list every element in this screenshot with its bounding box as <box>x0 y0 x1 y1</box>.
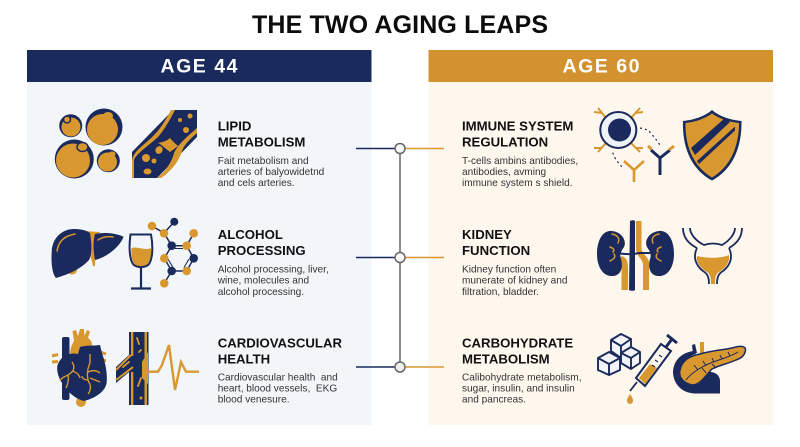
icon: wine glass <box>130 234 152 288</box>
text: alcohol processing: alcohol processing. <box>218 287 304 298</box>
text: immune system regulation: immune system s shield. <box>462 178 573 189</box>
connector: row 2 <box>356 252 444 262</box>
text: lipid metabolism: Fait metabolism and <box>218 156 309 167</box>
text: carbohydrate metabolism: and pancreas. <box>462 395 526 406</box>
icon: antibodies <box>613 128 674 182</box>
text: kidney function: FUNCTION <box>462 243 530 258</box>
connector: timeline spine <box>356 144 444 372</box>
icon: liver <box>51 229 124 278</box>
icon: heart <box>52 329 107 407</box>
text: cardiovascular health: blood venesure. <box>218 395 290 406</box>
heading: age 44 <box>27 50 372 82</box>
text: kidney function: Kidney function often <box>462 265 556 276</box>
text: alcohol processing: Alcohol processing, liver, <box>218 265 329 276</box>
title: THE TWO AGING LEAPS <box>252 11 548 39</box>
text: immune system regulation: REGULATION <box>462 135 548 150</box>
text: kidney function <box>462 227 568 298</box>
icon: T-cell <box>594 108 643 152</box>
icon: syringe <box>627 335 677 404</box>
text: immune system regulation: antibodies, avming <box>462 167 546 178</box>
text: cardiovascular health <box>218 335 342 406</box>
text: kidney function: filtration, bladder. <box>462 287 539 298</box>
icon: sugar cubes <box>598 334 640 375</box>
panel: age 60 <box>428 50 773 425</box>
text: immune system regulation: IMMUNE SYSTEM <box>462 119 573 134</box>
text: carbohydrate metabolism: CARBOHYDRATE <box>462 335 573 350</box>
icon: fat cells <box>55 108 122 178</box>
heading: age 44: AGE 44 <box>160 56 238 78</box>
text: carbohydrate metabolism: METABOLISM <box>462 351 550 366</box>
icon: artery with plaque <box>132 110 197 178</box>
icon: EKG line <box>148 345 199 390</box>
panel: age 44 <box>27 50 372 425</box>
text: lipid metabolism: and cels arteries. <box>218 178 295 189</box>
heading: age 60 <box>428 50 773 82</box>
text: carbohydrate metabolism <box>462 335 582 406</box>
text: immune system regulation <box>462 119 578 189</box>
icon: bladder <box>683 228 742 284</box>
text: alcohol processing: PROCESSING <box>218 243 306 258</box>
text: cardiovascular health: heart, blood vessels, EKG <box>218 384 337 395</box>
text: kidney function: munerate of kidney and <box>462 276 568 287</box>
text: lipid metabolism: METABOLISM <box>218 135 305 150</box>
text: lipid metabolism <box>218 119 324 189</box>
icon: molecule <box>148 218 198 288</box>
text: cardiovascular health: HEALTH <box>218 351 270 366</box>
icon: kidneys <box>597 220 674 291</box>
text: alcohol processing <box>217 227 329 298</box>
text: cardiovascular health: CARDIOVASCULAR <box>218 335 342 350</box>
text: kidney function: KIDNEY <box>462 227 512 242</box>
text: immune system regulation: T-cells ambins antibodies, <box>462 156 578 167</box>
text: carbohydrate metabolism: Calibohydrate metabolism, <box>462 373 582 384</box>
heading: age 60: AGE 60 <box>562 56 640 78</box>
icon: blood vessel <box>116 332 148 405</box>
text: lipid metabolism: LIPID <box>218 119 251 134</box>
connector: row 1 <box>356 144 444 154</box>
icon: pancreas <box>673 342 746 394</box>
text: lipid metabolism: arteries of balyowidetnd <box>218 167 324 178</box>
icon: shield <box>683 110 742 180</box>
text: cardiovascular health: Cardiovascular health and <box>218 373 338 384</box>
text: alcohol processing: ALCOHOL <box>218 227 283 242</box>
text: alcohol processing: wine, molecules and <box>217 276 309 287</box>
connector: row 3 <box>356 362 444 372</box>
text: carbohydrate metabolism: sugar, insulin, and insulin <box>462 384 575 395</box>
